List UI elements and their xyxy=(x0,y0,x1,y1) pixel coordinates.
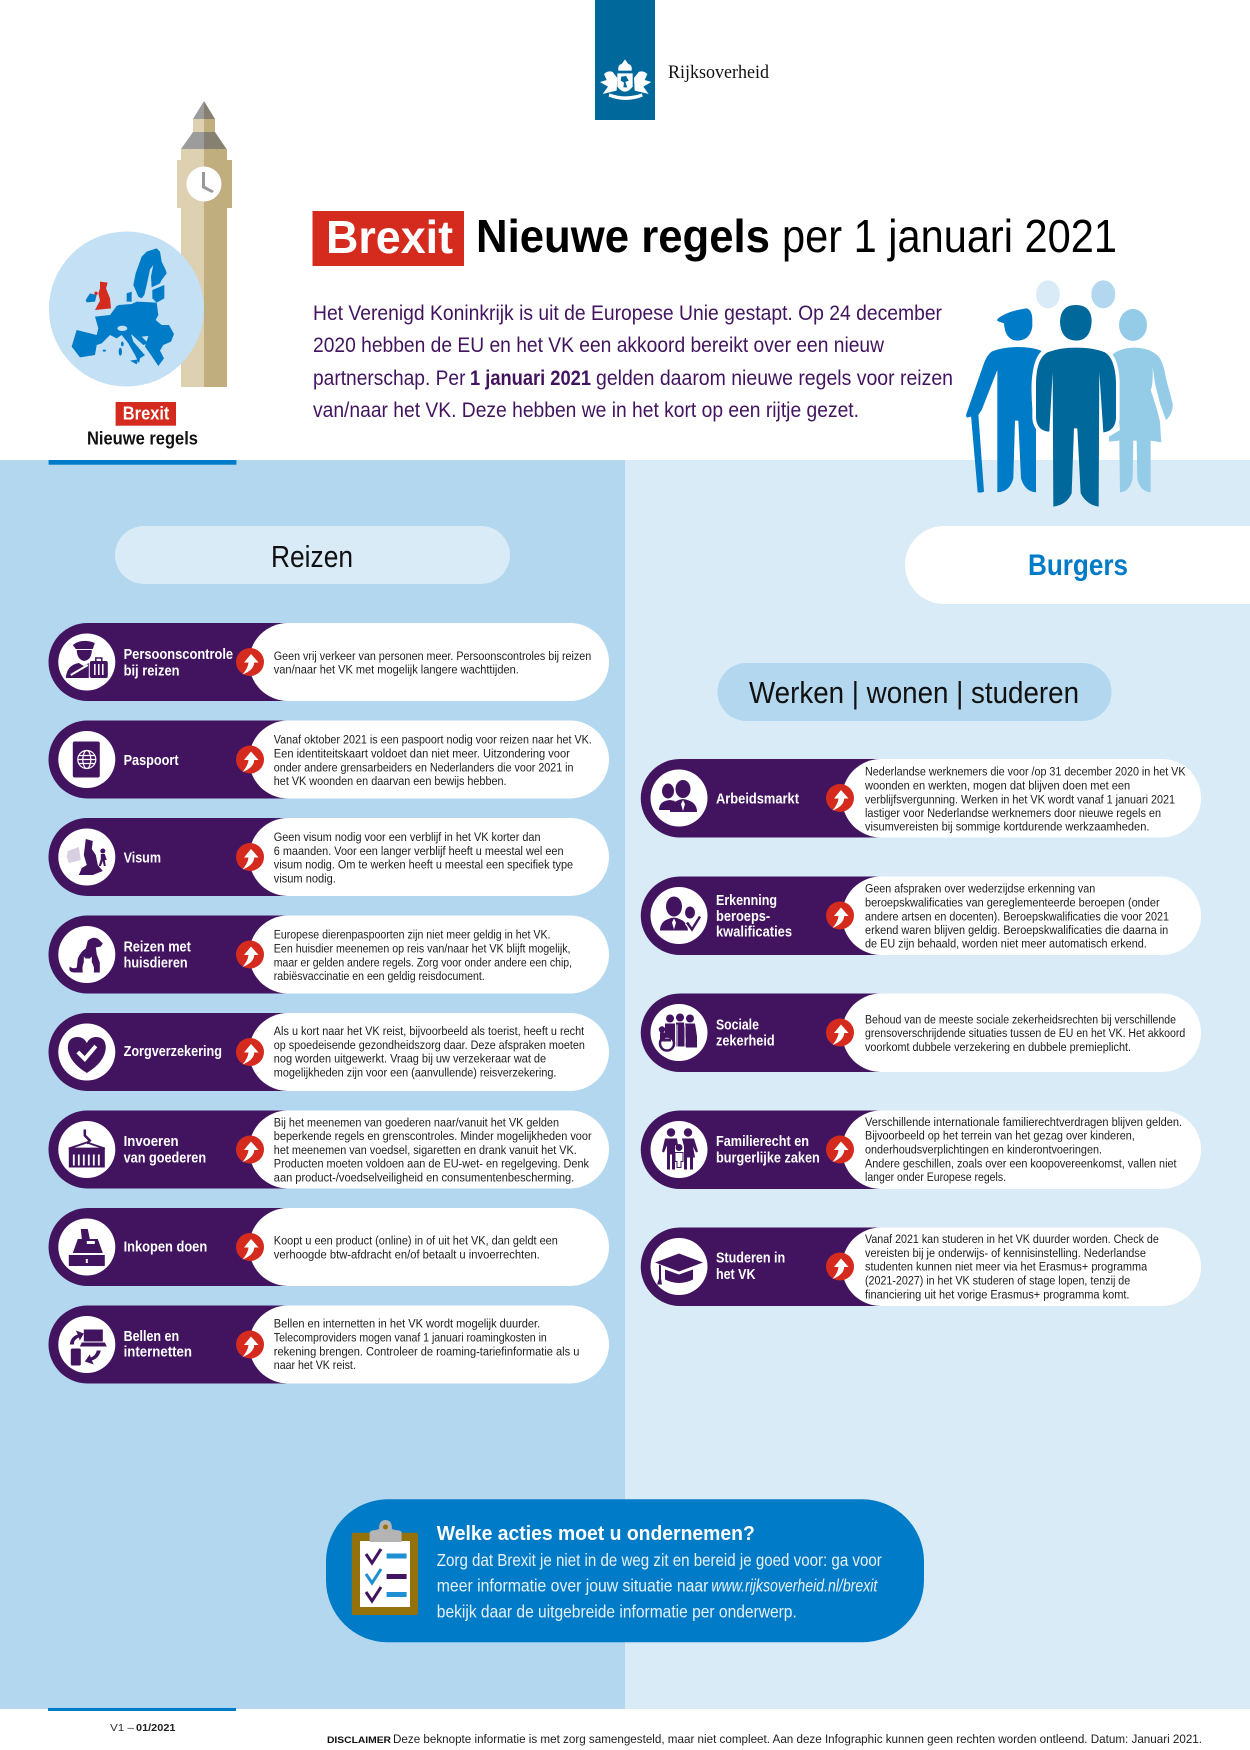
footer: version: V1 – xyxy=(110,1722,134,1734)
intro text: van/naar het VK. Deze hebben we in het kort op een rijtje gezet. xyxy=(313,398,859,422)
footer: disclaimer: DISCLAIMER xyxy=(327,1735,391,1746)
icon: arrow xyxy=(236,648,264,676)
label: Zorgverzekering xyxy=(124,1044,222,1060)
label: Nieuwe regels small: Nieuwe regels xyxy=(87,428,198,448)
description: Geen afspraken over wederzijdse erkenning van xyxy=(865,882,1095,896)
row: Sociale zekerheid xyxy=(641,994,1201,1072)
callout text: meer informatie over jouw situatie naar xyxy=(437,1576,709,1596)
description: verblijfsvergunning. Werken in het VK wordt vanaf 1 januari 2021 xyxy=(865,792,1175,806)
heading: Werken wonen studeren: Werken | wonen | studeren xyxy=(749,675,1079,710)
description: vereisten bij je onderwijs- of kennisinstelling. Nederlandse xyxy=(865,1246,1146,1260)
heading: Werken wonen studeren xyxy=(718,663,1112,721)
illustration: EU map in circle xyxy=(49,232,204,386)
panel: right background xyxy=(625,460,1250,1709)
description xyxy=(274,733,592,788)
footer: version: 01/2021 xyxy=(136,1722,176,1734)
description: financiering uit het vorige Erasmus+ programma komt. xyxy=(865,1287,1130,1301)
icon: family xyxy=(650,1121,708,1178)
description: beroepskwalificaties van gereglementeerde beroepen (onder xyxy=(865,895,1160,909)
label: huisdieren xyxy=(124,956,188,972)
icon: arrow xyxy=(236,746,264,774)
footer: disclaimer: Deze beknopte informatie is met zorg samengesteld, maar niet compleet. Aan deze Infographic kunnen geen rechten worden ontleend. Datum: Januari 2021. xyxy=(393,1732,1202,1746)
label: Sociale xyxy=(716,1017,759,1033)
intro text xyxy=(313,301,953,422)
callout text xyxy=(437,1550,882,1622)
row: Visum xyxy=(49,818,609,896)
description: langer onder Europese regels. xyxy=(865,1170,1006,1184)
description: Bellen en internetten in het VK wordt mogelijk duurder. xyxy=(274,1316,540,1330)
description: van/naar het VK met mogelijk langere wachttijden. xyxy=(274,663,519,677)
label: internetten xyxy=(124,1345,192,1361)
icon: border officer xyxy=(58,634,115,690)
heading: Reizen xyxy=(115,526,510,584)
description: voorkomt dubbele verzekering en dubbele premieplicht. xyxy=(865,1040,1131,1054)
description xyxy=(274,649,591,677)
intro text: Het Verenigd Koninkrijk is uit de Europese Unie gestapt. Op 24 december xyxy=(313,301,942,325)
illustration: Big Ben tower xyxy=(177,101,232,387)
description: Vanaf oktober 2021 is een paspoort nodig voor reizen naar het VK. xyxy=(274,733,592,747)
intro text: partnerschap. Per xyxy=(313,366,466,390)
label: Invoeren xyxy=(124,1134,179,1150)
description: 6 maanden. Voor een langer verblijf heeft u meestal wel een xyxy=(274,844,564,858)
label: Familierecht en xyxy=(716,1134,809,1150)
footer: version xyxy=(110,1722,176,1734)
description: Andere geschillen, zoals over een koopovereenkomst, vallen niet xyxy=(865,1156,1177,1170)
label xyxy=(716,1017,775,1050)
description: verhoogde btw-afdracht en/of betaalt u invoerrechten. xyxy=(274,1247,540,1261)
row: Familierecht en burgerlijke zaken xyxy=(641,1110,1201,1189)
label xyxy=(716,1251,785,1283)
label: Visum xyxy=(124,850,161,866)
icon: arrow xyxy=(236,843,264,871)
row: Inkopen doen xyxy=(49,1208,609,1286)
icon: graduation cap xyxy=(650,1238,708,1295)
description: studenten kunnen niet meer via het Erasmus+ programma xyxy=(865,1260,1147,1274)
illustration: people xyxy=(966,280,1173,507)
icon: person with check xyxy=(650,887,708,944)
description xyxy=(865,1232,1159,1301)
intro text: 2020 hebben de EU en het VK een akkoord bereikt over een nieuw xyxy=(313,333,884,357)
description: visum nodig. Om te werken heeft u meestal een specifiek type xyxy=(274,858,573,872)
title xyxy=(312,210,1117,266)
intro text: gelden daarom nieuwe regels voor reizen xyxy=(596,366,953,390)
icon: UK map with traveller xyxy=(58,828,115,886)
description: onderhoudsverplichtingen en kinderontvoeringen. xyxy=(865,1143,1102,1157)
description: onder andere grensarbeiders en Nederlanders die voor 2021 in xyxy=(274,760,574,774)
label: bij reizen xyxy=(124,664,180,680)
callout heading: Welke acties moet u ondernemen? xyxy=(437,1523,755,1545)
description xyxy=(865,1115,1182,1184)
intro text: 1 januari 2021 xyxy=(470,366,591,390)
description: andere artsen en docenten). Beroepskwalificaties die voor 2021 xyxy=(865,909,1169,923)
label: Brexit small: Brexit xyxy=(123,403,169,423)
title: Nieuwe regels xyxy=(476,210,770,262)
heading: Burgers xyxy=(905,526,1250,604)
description: grensoverschrijdende situaties tussen de EU en het VK. Het akkoord xyxy=(865,1026,1185,1040)
description: Behoud van de meeste sociale zekerheidsrechten bij verschillende xyxy=(865,1012,1176,1026)
description: woonden en werkten, mogen dat blijven doen met een xyxy=(864,778,1130,792)
label: burgerlijke zaken xyxy=(716,1150,820,1166)
description: de EU zijn behaald, worden niet meer automatisch erkend. xyxy=(865,937,1147,951)
icon: arrow xyxy=(236,1330,264,1358)
label: Persoonscontrole xyxy=(124,647,233,663)
icon: arrow xyxy=(826,1136,854,1164)
description xyxy=(274,1316,579,1372)
description: rekening brengen. Controleer de roaming-tariefinformatie als u xyxy=(274,1344,579,1358)
description: beperkende regels en grenscontroles. Minder mogelijkheden voor xyxy=(274,1129,592,1143)
description xyxy=(274,1115,592,1185)
label: Inkopen doen xyxy=(124,1240,207,1256)
icon: arrow xyxy=(236,1136,264,1164)
description xyxy=(274,1024,585,1080)
label: beroeps- xyxy=(716,909,770,925)
icon: arrow xyxy=(236,940,264,968)
description: (2021-2027) in het VK studeren of stage lopen, tenzij de xyxy=(865,1273,1130,1287)
label: Bellen en xyxy=(124,1329,179,1345)
icon: passport xyxy=(58,731,115,788)
description: Een identiteitskaart voldoet dan niet meer. Uitzondering voor xyxy=(274,747,570,761)
heading: Burgers: Burgers xyxy=(1028,549,1128,582)
description: aan product-/voedselveiligheid en consumentenbescherming. xyxy=(274,1171,574,1185)
icon: arrow xyxy=(826,902,854,930)
icon: two business people xyxy=(650,770,708,826)
description: Producten moeten voldoen aan de EU-wet- en regelgeving. Denk xyxy=(274,1157,590,1171)
description: naar het VK reist. xyxy=(274,1358,356,1372)
row: Invoeren van goederen xyxy=(49,1110,609,1188)
description: maar er gelden andere regels. Zorg voor onder andere een chip, xyxy=(274,955,572,969)
description xyxy=(274,1233,558,1261)
description xyxy=(274,830,573,886)
label xyxy=(124,1329,192,1361)
description: op spoedeisende gezondheidszorg daar. Deze afspraken moeten xyxy=(274,1038,585,1052)
label xyxy=(716,1134,820,1166)
label: Arbeidsmarkt xyxy=(716,791,799,807)
icon: arrow xyxy=(236,1233,264,1261)
description: het meenemen van voedsel, sigaretten en drank vanuit het VK. xyxy=(274,1143,577,1157)
row: Persoonscontrole bij reizen xyxy=(49,623,609,701)
label: Paspoort xyxy=(124,753,179,769)
label xyxy=(716,893,792,941)
description: Als u kort naar het VK reist, bijvoorbeeld als toerist, heeft u recht xyxy=(274,1024,585,1038)
label xyxy=(124,940,191,972)
heading: Reizen: Reizen xyxy=(271,539,353,574)
label: van goederen xyxy=(124,1150,206,1166)
description: Bijvoorbeeld op het terrein van het gezag over kinderen, xyxy=(865,1129,1135,1143)
icon: arrow xyxy=(826,784,854,812)
description: visum nodig. xyxy=(274,872,336,886)
icon: container on crane hook xyxy=(58,1121,115,1178)
callout text: Zorg dat Brexit je niet in de weg zit en bereid je goed voor: ga voor xyxy=(437,1550,882,1570)
description: rabiësvaccinatie en een geldig reisdocument. xyxy=(274,969,485,983)
label: het VK xyxy=(716,1267,756,1283)
label: kwalificaties xyxy=(716,925,792,941)
title: Brexit xyxy=(326,211,453,263)
description: Nederlandse werknemers die voor /op 31 december 2020 in het VK xyxy=(865,765,1186,779)
logo: Rijksoverheid xyxy=(595,0,769,120)
icon: heart with check xyxy=(58,1024,115,1080)
logo wordmark: Rijksoverheid xyxy=(668,62,769,83)
callout text: www.rijksoverheid.nl/brexit xyxy=(711,1576,878,1596)
row: Studeren in het VK xyxy=(641,1228,1201,1306)
description xyxy=(864,765,1186,834)
row: Zorgverzekering xyxy=(49,1013,609,1091)
description: visumvereisten bij sommige kortdurende werkzaamheden. xyxy=(865,820,1149,834)
callout: Welke acties xyxy=(326,1499,924,1642)
icon: arrow xyxy=(826,1018,854,1046)
label xyxy=(124,647,233,680)
description: het VK woonden en daarvan een bewijs hebben. xyxy=(274,774,506,788)
icon: cash register xyxy=(58,1218,115,1276)
label xyxy=(124,1134,206,1166)
icon: arrow xyxy=(236,1038,264,1066)
description: Verschillende internationale familierechtverdragen blijven gelden. xyxy=(865,1115,1182,1129)
description: nog worden uitgewerkt. Vraag bij uw verzekeraar wat de xyxy=(274,1052,546,1066)
description: Geen vrij verkeer van personen meer. Persoonscontroles bij reizen xyxy=(274,649,591,663)
label: zekerheid xyxy=(716,1034,775,1050)
row: Erkenning beroepskwalificaties xyxy=(641,876,1201,955)
title: per 1 januari 2021 xyxy=(782,210,1117,262)
description: erkend waren blijven geldig. Beroepskwalificaties die daarna in xyxy=(865,923,1168,937)
row: Paspoort xyxy=(49,720,609,798)
row: Reizen met huisdieren xyxy=(49,916,609,994)
description: Telecomproviders mogen vanaf 1 januari roamingkosten in xyxy=(274,1330,547,1344)
row: Arbeidsmarkt xyxy=(641,759,1201,838)
icon: arrow xyxy=(826,1252,854,1280)
icon: dog and cat xyxy=(58,926,115,983)
callout text: bekijk daar de uitgebreide informatie per onderwerp. xyxy=(437,1602,797,1622)
description: Een huisdier meenemen op reis van/naar het VK blijft mogelijk, xyxy=(274,941,570,955)
icon: devices with arrows xyxy=(58,1316,115,1373)
panel: left background xyxy=(0,460,625,1709)
description xyxy=(274,928,572,983)
label: Reizen met xyxy=(124,940,191,956)
description: mogelijkheden zijn voor een (aanvullende) reisverzekering. xyxy=(274,1066,556,1080)
description: Geen visum nodig voor een verblijf in het VK korter dan xyxy=(274,830,541,844)
description: Bij het meenemen van goederen naar/vanuit het VK gelden xyxy=(274,1115,559,1129)
label: Studeren in xyxy=(716,1251,785,1267)
description: Koopt u een product (online) in of uit het VK, dan geldt een xyxy=(274,1233,558,1247)
description: lastiger voor Nederlandse werknemers door nieuwe regels en xyxy=(865,806,1161,820)
row: Bellen en internetten xyxy=(49,1306,609,1384)
description xyxy=(865,882,1169,951)
icon: group with wheelchair xyxy=(650,1004,708,1061)
description xyxy=(865,1012,1185,1054)
description: Europese dierenpaspoorten zijn niet meer geldig in het VK. xyxy=(274,928,550,942)
label: Erkenning xyxy=(716,893,777,909)
description: Vanaf 2021 kan studeren in het VK duurder worden. Check de xyxy=(865,1232,1159,1246)
icon: clipboard xyxy=(352,1520,418,1615)
